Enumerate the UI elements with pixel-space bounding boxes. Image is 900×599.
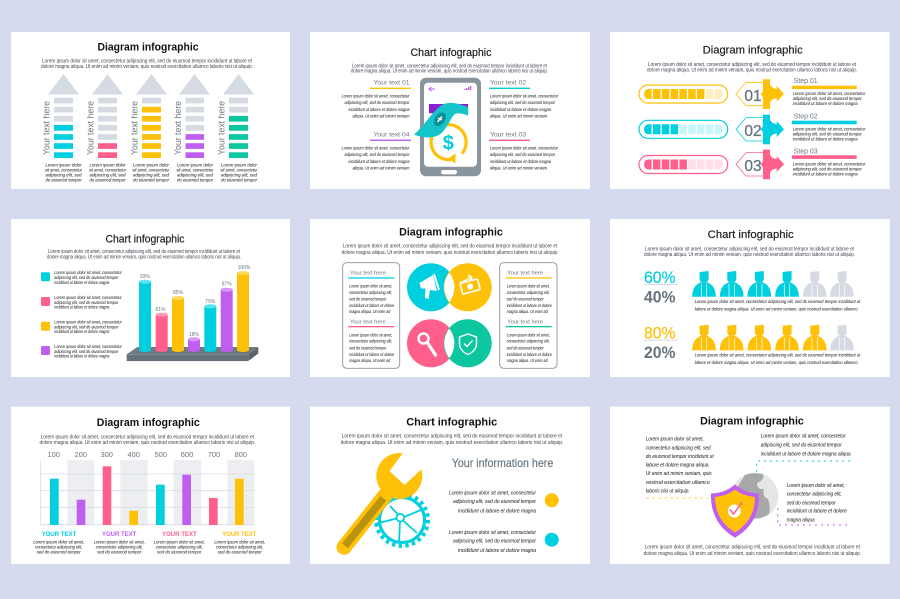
- legend: purple: [41, 344, 122, 359]
- panel: people percentage chart: [610, 219, 890, 377]
- caption 3: [154, 531, 205, 555]
- arrow column 3: yellow: Lorem ipsum dolor: [133, 162, 169, 168]
- legend: cyan: Lorem ipsum dolor sit amet, consectetur: [54, 270, 122, 275]
- row 1 caption: labore et dolore magna aliqua. Ut enim ad minim veniam, quis nostrud exercitation ullamco: [695, 306, 858, 312]
- text block 03: adipiscing elit, sed do eiusmod tempor: [490, 152, 555, 157]
- step 03 number and arrow: 03: [744, 158, 762, 175]
- text block 02: aliqua. Ut enim ad minim veniam: [490, 114, 547, 119]
- row 2 caption: labore et dolore magna aliqua. Ut enim ad minim veniam, quis nostrud exercitation ullamco: [695, 360, 858, 365]
- step 02 text: Lorem ipsum dolor sit amet, consectetur: [793, 126, 866, 131]
- heading: Chart infographic: [406, 416, 497, 428]
- panel: shield and globe diagram: [610, 407, 890, 564]
- right text block: magna aliqua: [787, 517, 815, 523]
- row 2 caption: [695, 352, 861, 365]
- bar chart: cylinders on platform: 100%: [238, 265, 251, 271]
- intro text: Lorem ipsum dolor sit amet, consectetur adipiscing elit, sed do eiusmod tempor incididunt ut labore et: [42, 58, 253, 64]
- panel: arrow column diagram: [11, 32, 290, 189]
- arrow column 3: yellow: [130, 74, 170, 182]
- top right text block: Lorem ipsum dolor sit amet, consectetur: [761, 434, 846, 440]
- arrow column 5: green: Your text here: [216, 101, 228, 155]
- footer text: Lorem ipsum dolor sit amet, consectetur adipiscing elit, sed do eiusmod tempor incididunt ut labore et: [645, 545, 861, 551]
- arrow column 3: yellow: Your text here: [130, 101, 140, 155]
- left text panel: magna aliqua. Ut enim ad: [349, 309, 391, 314]
- connector: cyan dotted: [757, 461, 850, 480]
- step 02 text: adipiscing elit, sed do eiusmod tempor: [793, 131, 862, 136]
- arrow column 4: purple: do eiusmod tempor: [177, 178, 213, 182]
- right text block: Lorem ipsum dolor sit amet,: [787, 483, 845, 489]
- caption 4: sed do eiusmod tempor: [218, 550, 262, 555]
- yellow item: incididunt ut labore et dolore magna: [458, 508, 536, 514]
- caption 1: Lorem ipsum dolor sit amet,: [33, 540, 84, 545]
- bar chart: cylinders on platform: 93%: [140, 274, 151, 280]
- bar chart: cylinders on platform: 87%: [222, 282, 232, 288]
- intro text: Lorem ipsum dolor sit amet, consectetur adipiscing elit, sed do eiusmod tempor incididunt ut labore et: [343, 244, 558, 250]
- arrow column 1: cyan: Your text here: [42, 101, 52, 155]
- intro text: [342, 244, 558, 256]
- caption 2: [94, 531, 145, 555]
- step 02 number and arrow: 02: [744, 123, 762, 140]
- heading: Chart infographic: [106, 234, 185, 246]
- intro text: dolore magna aliqua. Ut enim ad minim veniam, quis nostrud exercitation ullamco laboris nisi ut aliquip.: [47, 255, 241, 261]
- intro text: Lorem ipsum dolor sit amet, consectetur adipiscing elit, sed do eiusmod tempor incididunt ut labore et: [648, 62, 857, 68]
- step 02 text: [792, 113, 866, 141]
- left text block: Lorem ipsum dolor sit amet,: [646, 437, 704, 443]
- icon: phone with banknote and dollar: $: [443, 132, 454, 154]
- legend: purple: adipiscing elit, sed do eiusmod tempor: [54, 349, 119, 354]
- caption 1: consectetur adipiscing elit,: [35, 545, 82, 550]
- caption 2: sed do eiusmod tempor: [97, 550, 142, 555]
- legend: purple: Lorem ipsum dolor sit amet, consectetur: [54, 344, 122, 349]
- stat: 60% / 40%: 60%: [644, 268, 676, 287]
- legend: pink: Lorem ipsum dolor sit amet, consectetur: [54, 295, 122, 300]
- left text block: consectetur adipiscing elit, sed: [646, 445, 712, 451]
- arrow column 5: green: [216, 74, 258, 182]
- stat: 80% / 20%: 20%: [644, 343, 676, 362]
- arrow column 1: cyan: Lorem ipsum dolor: [46, 162, 82, 168]
- axis values: 200: [74, 450, 87, 459]
- step 02 text: Step 02: [794, 113, 818, 120]
- step 03 text: Lorem ipsum dolor sit amet, consectetur: [793, 161, 866, 166]
- yellow item: adipiscing elit, sed do eiusmod tempor: [453, 499, 536, 505]
- arrow column 4: purple: Your text here: [173, 101, 184, 155]
- intro text: [351, 64, 548, 74]
- legend: pink: [41, 295, 122, 310]
- left text block: laboris nisi ut aliquip.: [646, 489, 690, 495]
- arrow column 3: yellow: sit amet, consectetur: [132, 168, 170, 172]
- text block 03: Your text 03: [490, 132, 526, 138]
- intro text: dolore magna aliqua. Ut enim ad minim veniam, quis nostrud exercitation ullamco laboris nisi ut aliquip.: [41, 64, 253, 70]
- right text block: sed do eiusmod tempor: [787, 500, 836, 506]
- right text panel: consectetur adipiscing elit,: [507, 290, 550, 295]
- stat: 80% / 20%: 80%: [644, 324, 676, 343]
- caption 3: Lorem ipsum dolor sit amet,: [154, 540, 205, 545]
- legend: pink: incididunt ut labore et dolore magna: [54, 305, 110, 310]
- text block 03: [489, 132, 558, 171]
- right text panel: magna aliqua. Ut enim ad: [507, 309, 548, 314]
- left text panel: Your text here: [350, 320, 386, 326]
- step 01 text: Step 01: [794, 78, 818, 85]
- text block 01: Lorem ipsum dolor sit amet, consectetur: [342, 94, 410, 98]
- text block 04: adipiscing elit, sed do eiusmod tempor: [344, 152, 410, 157]
- panel: 3D cylinder bar chart: [11, 219, 290, 377]
- row 2 caption: Lorem ipsum dolor sit amet, consectetur adipiscing elit, sed do eiusmod tempor incididunt ut: [695, 352, 861, 357]
- intro text: Lorem ipsum dolor sit amet, consectetur adipiscing elit, sed do eiusmod tempor incididunt ut labore et: [41, 434, 255, 440]
- arrow column 4: purple: sit amet, consectetur: [176, 168, 214, 172]
- intro text: Lorem ipsum dolor sit amet, consectetur adipiscing elit, sed do eiusmod tempor incididunt ut labore et: [48, 249, 241, 255]
- caption 1: sed do eiusmod tempor: [37, 550, 81, 555]
- text block 02: incididunt ut labore et dolore magna: [490, 107, 551, 112]
- axis values: 500: [154, 450, 167, 459]
- text block 04: Lorem ipsum dolor sit amet, consectetur: [342, 146, 410, 150]
- top right text block: adipiscing elit, sed do eiusmod tempor: [761, 442, 842, 448]
- row 1 caption: Lorem ipsum dolor sit amet, consectetur adipiscing elit, sed do eiusmod tempor incididunt ut: [695, 299, 861, 304]
- pictogram row: 4 of 6 cyan: [692, 271, 854, 297]
- arrow column 2: pink: sit amet, consectetur: [89, 168, 126, 172]
- step 03 number and arrow: [736, 150, 784, 179]
- step 03 text: Step 03: [794, 148, 818, 155]
- axis values: [47, 450, 247, 459]
- step 03 progress capsule: [639, 156, 728, 174]
- intro text: dolore magna aliqua. Ut enim ad minim veniam, quis nostrud exercitation ullamco laboris nisi ut aliquip.: [644, 252, 855, 258]
- heading: Diagram infographic: [700, 416, 804, 428]
- stat: 80% / 20%: [644, 324, 678, 362]
- caption 2: Lorem ipsum dolor sit amet,: [94, 540, 145, 545]
- connector: yellow dotted: [647, 497, 708, 499]
- right text panel: Your text here: [507, 271, 543, 277]
- left text panel: consectetur adipiscing elit,: [349, 339, 392, 344]
- arrow column 2: pink: [86, 74, 126, 182]
- right text panel: Your text here: [507, 320, 543, 326]
- right text panel: sed do eiusmod tempor: [507, 296, 544, 301]
- intro text: Lorem ipsum dolor sit amet, consectetur adipiscing elit, sed do eiusmod tempor incididunt ut labore et: [645, 246, 855, 252]
- left text panel: consectetur adipiscing elit,: [349, 290, 392, 295]
- text block 02: Your text 02: [490, 80, 526, 86]
- footer text: dolore magna aliqua. Ut enim ad minim veniam, quis nostrud exercitation ullamco laboris nisi ut aliquip.: [644, 551, 861, 557]
- text block 02: Lorem ipsum dolor sit amet, consectetur: [490, 94, 558, 98]
- footer text: [644, 545, 861, 557]
- left text panel: incididunt ut labore et dolore: [349, 352, 395, 357]
- axis values: 700: [208, 450, 220, 459]
- left text panel: Your text here: [350, 271, 386, 277]
- heading: Chart infographic: [410, 47, 492, 59]
- yellow item: Lorem ipsum dolor sit amet, consectetur: [449, 490, 536, 496]
- bar chart: cylinders on platform: 85%: [173, 290, 184, 296]
- intro text: [39, 434, 255, 446]
- caption 4: [214, 531, 265, 555]
- icon: globe: [732, 473, 778, 519]
- text block 01: Your text 01: [374, 80, 410, 86]
- left text block: Ut enim ad minim veniam, quis: [646, 471, 712, 477]
- arrow column 2: pink: adipiscing elit, sed: [90, 172, 126, 178]
- arrow column 5: green: do eiusmod tempor: [221, 178, 257, 182]
- text block 03: incididunt ut labore et dolore magna: [490, 159, 551, 164]
- intro text: dolore magna aliqua. Ut enim ad minim veniam, quis nostrud exercitation ullamco laboris nisi ut aliquip.: [342, 250, 558, 256]
- left text block: do eiusmod tempor incididunt ut: [646, 454, 714, 460]
- left text panel: incididunt ut labore et dolore: [349, 303, 395, 308]
- arrow column 4: purple: Lorem ipsum dolor: [177, 162, 213, 168]
- heading: Diagram infographic: [703, 44, 803, 56]
- icon: phone with banknote and dollar: [414, 78, 481, 176]
- heading: Diagram infographic: [399, 226, 503, 238]
- legend: yellow: Lorem ipsum dolor sit amet, consectetur: [54, 320, 122, 325]
- text block 04: incididunt ut labore et dolore magna: [348, 159, 410, 164]
- arrow column 2: pink: Lorem ipsum dolor: [90, 162, 126, 168]
- text block 01: adipiscing elit, sed do eiusmod tempor: [344, 100, 410, 105]
- bottom circle pair with magnifier and shield icons: [407, 319, 492, 367]
- bar chart: cylinders on platform: 61%: [155, 307, 166, 313]
- intro text: dolore magna aliqua. Ut enim ad minim veniam, quis nostrud exercitation ullamco laboris nisi ut aliquip.: [39, 440, 255, 446]
- caption 3: YOUR TEXT: [162, 531, 197, 538]
- right text panel: incididunt ut labore et dolore: [507, 352, 552, 357]
- text block 01: [342, 80, 411, 119]
- legend: cyan: adipiscing elit, sed do eiusmod tempor: [54, 275, 119, 280]
- arrow column 4: purple: adipiscing elit, sed: [177, 172, 213, 178]
- arrow column 2: pink: do eiusmod tempor: [90, 178, 126, 182]
- arrow column 3: yellow: do eiusmod tempor: [133, 178, 169, 182]
- step 02 number and arrow: [736, 115, 784, 144]
- text block 03: Lorem ipsum dolor sit amet, consectetur: [490, 146, 558, 150]
- intro text: [41, 58, 253, 70]
- panel: venn circle diagram: [310, 219, 590, 377]
- arrow column 2: pink: Your text here: [86, 101, 96, 155]
- cyan item: [449, 530, 559, 554]
- arrow column 5: green: adipiscing elit, sed: [221, 172, 257, 178]
- caption 2: YOUR TEXT: [102, 531, 136, 538]
- text block 04: [342, 132, 411, 171]
- right text block: consectetur adipiscing elit,: [787, 492, 842, 498]
- intro text: [644, 246, 855, 258]
- cyan item: Lorem ipsum dolor sit amet, consectetur: [449, 530, 536, 536]
- intro text: dolore magna aliqua. Ut enim ad minim veniam, quis nostrud exercitation ullamco laboris nisi ut aliquip.: [351, 68, 548, 74]
- axis values: 600: [181, 450, 193, 459]
- arrow column 1: cyan: adipiscing elit, sed: [46, 172, 82, 178]
- bar chart: cylinders on platform: [127, 265, 258, 361]
- caption 3: consectetur adipiscing elit,: [156, 545, 203, 550]
- legend: cyan: [41, 270, 122, 285]
- yellow item: [449, 490, 559, 514]
- top circle pair with megaphone and money icons: [407, 263, 492, 311]
- legend: yellow: adipiscing elit, sed do eiusmod tempor: [54, 324, 119, 329]
- step 01 progress capsule: [639, 85, 728, 103]
- caption 1: YOUR TEXT: [42, 531, 76, 538]
- arrow column 4: purple: [173, 74, 214, 182]
- left text block: [646, 437, 714, 495]
- arrow column 3: yellow: adipiscing elit, sed: [133, 172, 169, 178]
- left text panel: Lorem ipsum dolor sit amet,: [349, 284, 392, 289]
- caption 3: sed do eiusmod tempor: [157, 550, 202, 555]
- row 1 caption: [695, 299, 861, 312]
- step 01 text: Lorem ipsum dolor sit amet, consectetur: [793, 91, 866, 96]
- step 02 text: incididunt ut labore et dolore magna: [793, 136, 858, 141]
- text block 04: Your text 04: [374, 132, 410, 138]
- text block 01: aliqua. Ut enim ad minim veniam: [352, 114, 410, 119]
- axis values: 300: [100, 450, 113, 459]
- step 01 text: [792, 78, 866, 106]
- left text panel: sed do eiusmod tempor: [349, 296, 387, 301]
- legend: yellow: incididunt ut labore et dolore magna: [54, 329, 110, 334]
- left text block: nostrud exercitation ullamco: [646, 480, 710, 486]
- text block 02: [489, 80, 558, 119]
- connector: purple dotted: [778, 508, 850, 525]
- step 03 text: incididunt ut labore et dolore magna: [793, 171, 858, 176]
- caption 1: [33, 531, 84, 555]
- panel: column chart: [11, 407, 290, 564]
- intro text: dolore magna aliqua. Ut enim ad minim veniam, quis nostrud exercitation ullamco laboris nisi ut aliquip.: [647, 68, 857, 74]
- right text panel: incididunt ut labore et dolore: [507, 303, 552, 308]
- left text block: labore et dolore magna aliqua.: [646, 462, 710, 468]
- right text panel: consectetur adipiscing elit,: [507, 339, 550, 344]
- left text panel: magna aliqua. Ut enim ad: [349, 358, 391, 363]
- intro text: [341, 434, 563, 446]
- step 01 number and arrow: 01: [744, 88, 762, 105]
- axis values: 400: [127, 450, 140, 459]
- caption 4: consectetur adipiscing elit,: [216, 545, 263, 550]
- icon: gear: [375, 494, 428, 546]
- right text panel: sed do eiusmod tempor: [507, 345, 544, 350]
- step 01 text: incididunt ut labore et dolore magna: [793, 101, 858, 106]
- legend: purple: incididunt ut labore et dolore magna: [54, 354, 110, 359]
- right text panel: Lorem ipsum dolor sit amet,: [507, 284, 550, 289]
- stat: 60% / 40%: [644, 268, 678, 306]
- intro text: Lorem ipsum dolor sit amet, consectetur adipiscing elit, sed do eiusmod tempor incididunt ut labore et: [352, 64, 548, 70]
- pictogram row: 5 of 6 yellow: [692, 325, 854, 350]
- panel: wrench and gear: [310, 407, 590, 564]
- column chart grid and bars: [40, 460, 254, 525]
- cyan item: adipiscing elit, sed do eiusmod tempor: [453, 539, 536, 545]
- icon: wrench: [344, 449, 426, 547]
- top right text block: incididunt ut labore et dolore magna aliqua: [761, 451, 851, 457]
- step 03 text: [792, 148, 866, 176]
- text block 04: aliqua. Ut enim ad minim veniam: [352, 166, 410, 171]
- step 02 progress capsule: [639, 120, 728, 138]
- arrow column 1: cyan: do eiusmod tempor: [46, 178, 82, 182]
- intro text: [47, 249, 241, 261]
- top right text block: [761, 434, 851, 457]
- caption 2: consectetur adipiscing elit,: [96, 545, 143, 550]
- legend: pink: adipiscing elit, sed do eiusmod tempor: [54, 300, 119, 305]
- heading: Chart infographic: [708, 229, 794, 241]
- left text panel: sed do eiusmod tempor: [349, 345, 387, 350]
- caption 4: Lorem ipsum dolor sit amet,: [214, 540, 265, 545]
- right text block: incididunt ut labore et dolore: [787, 509, 847, 515]
- legend: yellow: [41, 320, 122, 334]
- right text panel: [500, 263, 557, 368]
- subheading: Your information here: [452, 456, 554, 470]
- cyan item: incididunt ut labore et dolore magna: [458, 548, 536, 554]
- right text block: [787, 483, 847, 523]
- heading: Diagram infographic: [98, 42, 198, 54]
- intro text: [647, 62, 857, 74]
- arrow column 5: green: sit amet, consectetur: [220, 168, 258, 172]
- bar chart: cylinders on platform: 18%: [189, 332, 200, 338]
- right text panel: magna aliqua. Ut enim ad: [507, 358, 548, 363]
- panel: three step progress diagram: [610, 32, 890, 189]
- bar chart: cylinders on platform: 79%: [205, 299, 216, 305]
- arrow column 1: cyan: sit amet, consectetur: [45, 168, 82, 172]
- text block 02: adipiscing elit, sed do eiusmod tempor: [490, 100, 555, 105]
- text block 03: aliqua. Ut enim ad minim veniam: [490, 166, 547, 171]
- step 01 text: adipiscing elit, sed do eiusmod tempor: [793, 96, 862, 101]
- text block 01: incididunt ut labore et dolore magna: [348, 107, 410, 112]
- right text panel: Lorem ipsum dolor sit amet,: [507, 332, 550, 337]
- arrow column 5: green: Lorem ipsum dolor: [221, 162, 257, 168]
- left text panel: [343, 263, 400, 368]
- arrow column 1: cyan: [42, 74, 82, 182]
- stat: 60% / 40%: 40%: [644, 288, 676, 306]
- panel: phone payment chart: [310, 32, 590, 189]
- axis values: 800: [234, 450, 247, 459]
- heading: Diagram infographic: [97, 417, 200, 429]
- intro text: dolore magna aliqua. Ut enim ad minim veniam, quis nostrud exercitation ullamco laboris nisi ut aliquip.: [341, 440, 563, 446]
- left text panel: Lorem ipsum dolor sit amet,: [349, 332, 392, 337]
- axis values: 100: [47, 450, 60, 459]
- step 03 text: adipiscing elit, sed do eiusmod tempor: [793, 166, 862, 171]
- caption 4: YOUR TEXT: [222, 531, 256, 538]
- legend: cyan: incididunt ut labore et dolore magna: [54, 280, 110, 285]
- step 01 number and arrow: [736, 79, 784, 109]
- intro text: Lorem ipsum dolor sit amet, consectetur adipiscing elit, sed do eiusmod tempor incididunt ut labore et: [342, 434, 563, 440]
- icon: shield: [711, 484, 759, 538]
